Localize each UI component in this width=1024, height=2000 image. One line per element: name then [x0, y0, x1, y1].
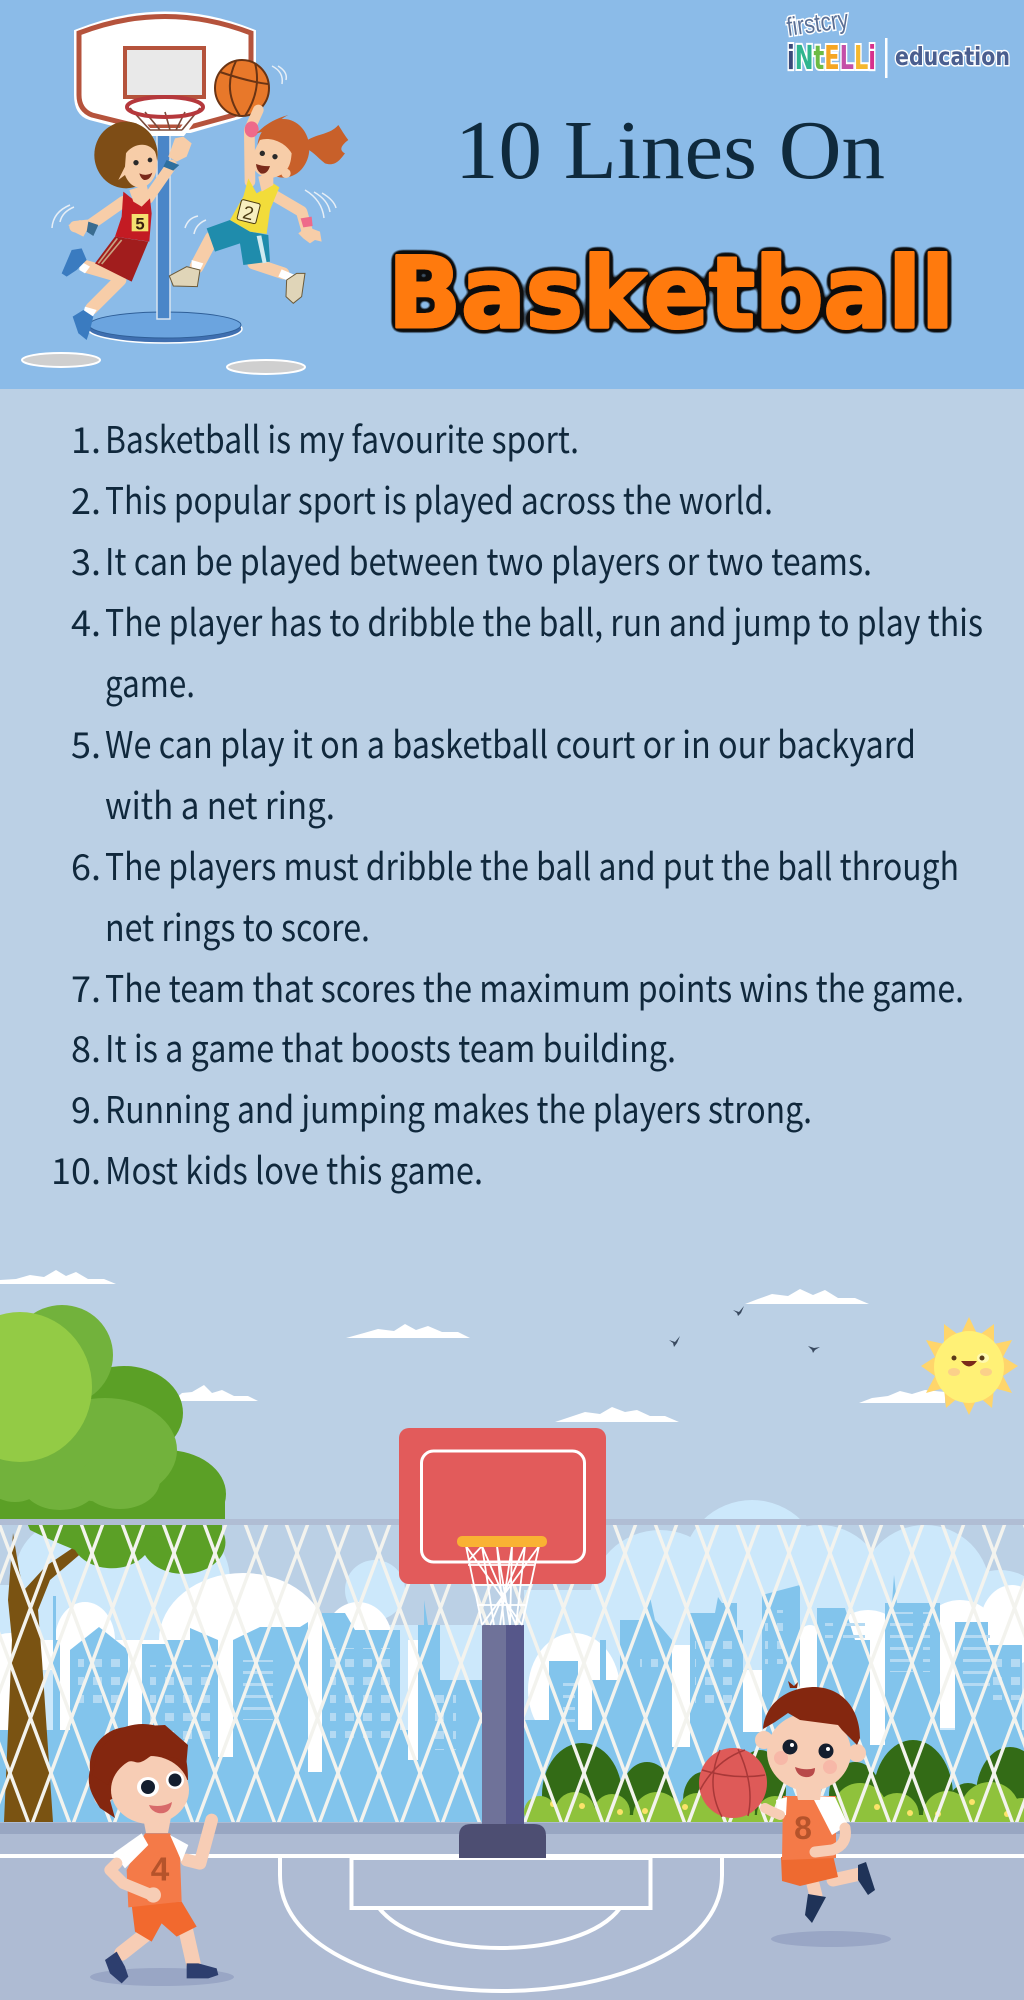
- title: 10 Lines On: 10 Lines On: [455, 104, 885, 197]
- boy 4 body: 4: [151, 1852, 170, 1889]
- text block: ten numbered lines: net rings to score.: [105, 898, 370, 952]
- player: boy number 8 with ball: [699, 1681, 891, 1947]
- text block: ten numbered lines: Running and jumping makes the players strong.: [105, 1080, 812, 1134]
- icon: tree: [0, 1305, 226, 1822]
- bushes: [524, 1740, 1024, 1852]
- background clouds and skyline: [0, 1500, 1024, 1822]
- text block: ten numbered lines: game.: [105, 654, 195, 708]
- boy 4 body: [105, 1820, 218, 1983]
- fence net: [0, 1519, 1024, 1822]
- text block: ten numbered lines: We can play it on a basketball court or in our backyard: [105, 715, 916, 769]
- icon: smiling sun: [921, 1317, 1018, 1415]
- birds: [669, 1306, 820, 1353]
- panel: header: [0, 0, 1024, 389]
- text block: ten numbered lines: This popular sport is played across the world.: [105, 471, 773, 525]
- icon: hoop stand and backboard: [22, 16, 305, 374]
- text block: ten numbered lines: [51, 410, 983, 1195]
- text block: ten numbered lines: 2.: [71, 473, 101, 525]
- logo: firstcry intelli education: firstcry: [785, 4, 850, 42]
- text block: ten numbered lines: 3.: [71, 534, 101, 586]
- panel: playground scene: [0, 1270, 1024, 2000]
- player: boy number 8 with ball: 8: [794, 1810, 812, 1846]
- text block: ten numbered lines: 5.: [71, 717, 101, 769]
- text block: ten numbered lines: 8.: [71, 1021, 101, 1073]
- text block: ten numbered lines: Most kids love this game.: [105, 1141, 483, 1195]
- text block: ten numbered lines: It can be played between two players or two teams.: [105, 532, 872, 586]
- logo: firstcry intelli education: [785, 4, 1010, 78]
- icon: red basketball: [699, 1748, 767, 1818]
- icon: basketball held up: [215, 60, 269, 116]
- basketball hoop: [399, 1428, 606, 1858]
- icon: girl player number 2: [169, 110, 348, 303]
- text block: ten numbered lines: 9.: [71, 1082, 101, 1134]
- text block: ten numbered lines: 10.: [51, 1143, 101, 1195]
- icon: boy player number 5: 5: [135, 214, 145, 233]
- player: boy number 4: [89, 1724, 234, 1986]
- logo: firstcry intelli education: iNtELLi: [787, 38, 876, 77]
- sky clouds: [0, 1270, 945, 1422]
- court ground: [0, 1822, 1024, 2000]
- text block: ten numbered lines: 4.: [71, 595, 101, 647]
- icon: girl player number 2: 2: [241, 201, 256, 224]
- text block: ten numbered lines: with a net ring.: [105, 776, 335, 830]
- title: Basketball: Basketball: [388, 237, 954, 351]
- text block: ten numbered lines: Basketball is my favourite sport.: [105, 410, 579, 464]
- text block: ten numbered lines: 7.: [71, 961, 101, 1013]
- text block: ten numbered lines: It is a game that boosts team building.: [105, 1019, 676, 1073]
- motion lines: [52, 66, 336, 234]
- text block: ten numbered lines: 6.: [71, 839, 101, 891]
- icon: boy player number 5: [62, 122, 192, 340]
- text block: ten numbered lines: 1.: [71, 412, 101, 464]
